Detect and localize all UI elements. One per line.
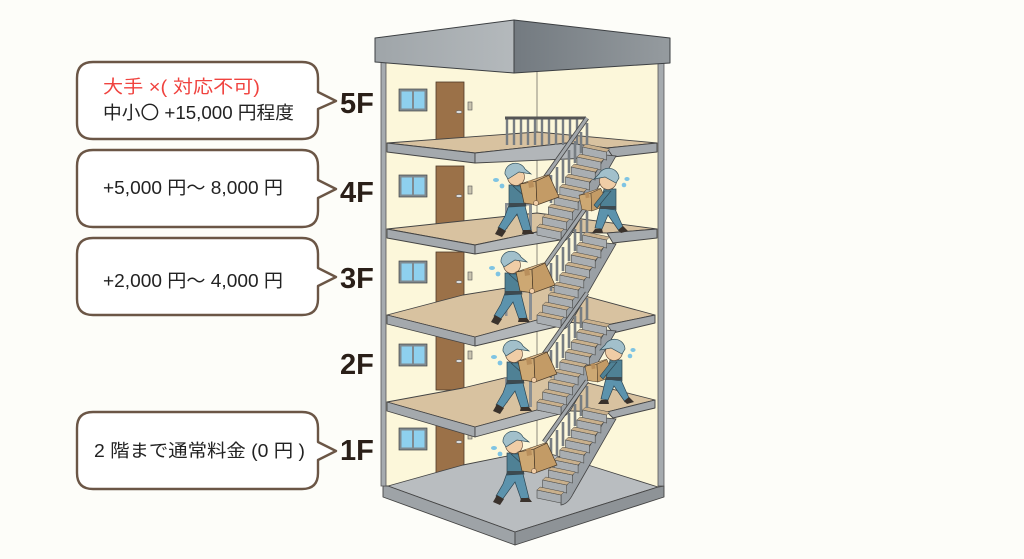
columns bbox=[381, 62, 664, 486]
roof bbox=[375, 20, 670, 73]
callout 5F: 大手 ×( 対応不可) bbox=[103, 77, 260, 97]
3F floor bbox=[387, 283, 655, 346]
worker 2F right bbox=[585, 339, 636, 404]
worker 1F bbox=[491, 431, 557, 505]
stair post 4F bbox=[505, 203, 532, 233]
callout 5F: 中小〇 +15,000 円程度 bbox=[103, 103, 294, 123]
door handles bbox=[456, 110, 462, 444]
stair post 3F bbox=[505, 290, 532, 320]
callout 1F: 2 階まで通常料金 (0 円 ) bbox=[94, 441, 305, 461]
1F ground slab bbox=[383, 450, 664, 545]
5F balcony railing bbox=[505, 118, 586, 145]
callout 5F bbox=[77, 62, 336, 139]
callout 3F: +2,000 円～ 4,000 円 bbox=[103, 271, 283, 291]
stairs 1F to 2F bbox=[537, 381, 616, 505]
2F floor bbox=[387, 370, 655, 437]
stair post 2F bbox=[505, 377, 532, 407]
floor label 5F: 5F bbox=[340, 88, 374, 120]
callout 4F bbox=[77, 150, 336, 227]
back walls bbox=[386, 62, 658, 490]
door switches bbox=[468, 102, 472, 439]
stairs 4F to 5F bbox=[537, 118, 616, 242]
building illustration bbox=[375, 20, 670, 545]
floor label 3F: 3F bbox=[340, 263, 374, 295]
doors bbox=[436, 82, 464, 474]
callout 3F bbox=[77, 238, 336, 315]
windows bbox=[399, 89, 427, 450]
stairs 2F to 3F bbox=[537, 293, 616, 417]
callout 1F bbox=[77, 412, 336, 489]
worker 3F bbox=[489, 251, 555, 325]
4F floor bbox=[387, 213, 657, 254]
floor label 1F: 1F bbox=[340, 435, 374, 467]
worker 4F left bbox=[493, 163, 559, 237]
worker 4F right bbox=[579, 168, 630, 233]
worker 2F left bbox=[491, 340, 557, 414]
5F floor bbox=[387, 132, 657, 163]
wall corner line bbox=[536, 70, 538, 450]
callout 4F: +5,000 円～ 8,000 円 bbox=[103, 178, 283, 198]
stairs 3F to 4F bbox=[537, 206, 616, 330]
floor label 2F: 2F bbox=[340, 349, 374, 381]
floor label 4F: 4F bbox=[340, 177, 374, 209]
